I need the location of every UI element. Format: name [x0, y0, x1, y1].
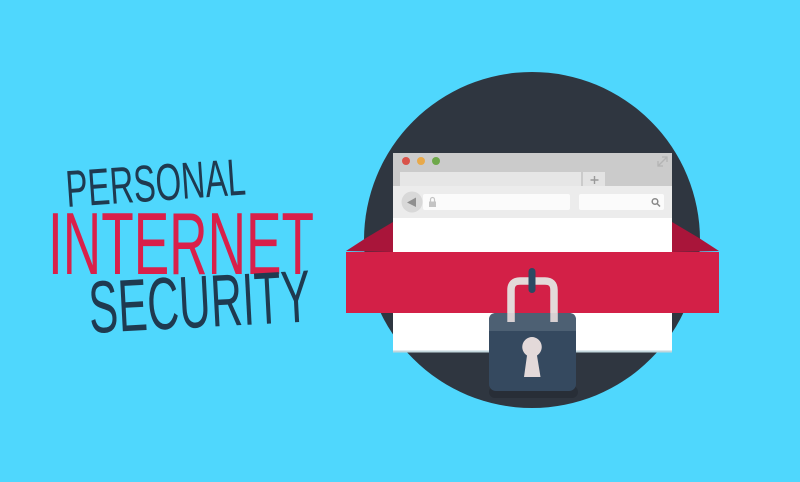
dark circle backdrop	[364, 72, 700, 408]
lock body	[489, 313, 576, 391]
shackle front legs	[507, 313, 558, 322]
padlock	[489, 268, 576, 391]
window body	[393, 153, 672, 352]
title word: PERSONAL: PERSONAL	[64, 149, 247, 219]
toolbar	[393, 186, 672, 218]
browser window	[393, 153, 672, 352]
search box	[579, 194, 664, 210]
active tab	[400, 172, 581, 186]
title bar	[393, 153, 672, 186]
ribbon back folds	[346, 222, 719, 252]
shackle strap loop	[528, 268, 536, 293]
lock shadow on circle	[489, 386, 578, 398]
new tab button	[583, 172, 605, 186]
search icon	[652, 199, 660, 206]
keyhole	[522, 337, 542, 377]
back button	[402, 192, 422, 212]
expand icon	[658, 157, 667, 166]
red ribbon	[346, 252, 719, 313]
address bar	[423, 194, 570, 210]
title word: SECURITY: SECURITY	[86, 254, 313, 349]
window control dots	[402, 157, 440, 165]
shackle	[511, 281, 554, 322]
title	[48, 149, 314, 349]
window shadow edge	[393, 350, 672, 352]
lock icon in address bar	[429, 198, 436, 207]
title word: INTERNET: INTERNET	[48, 194, 314, 293]
lock body top band	[489, 313, 576, 331]
